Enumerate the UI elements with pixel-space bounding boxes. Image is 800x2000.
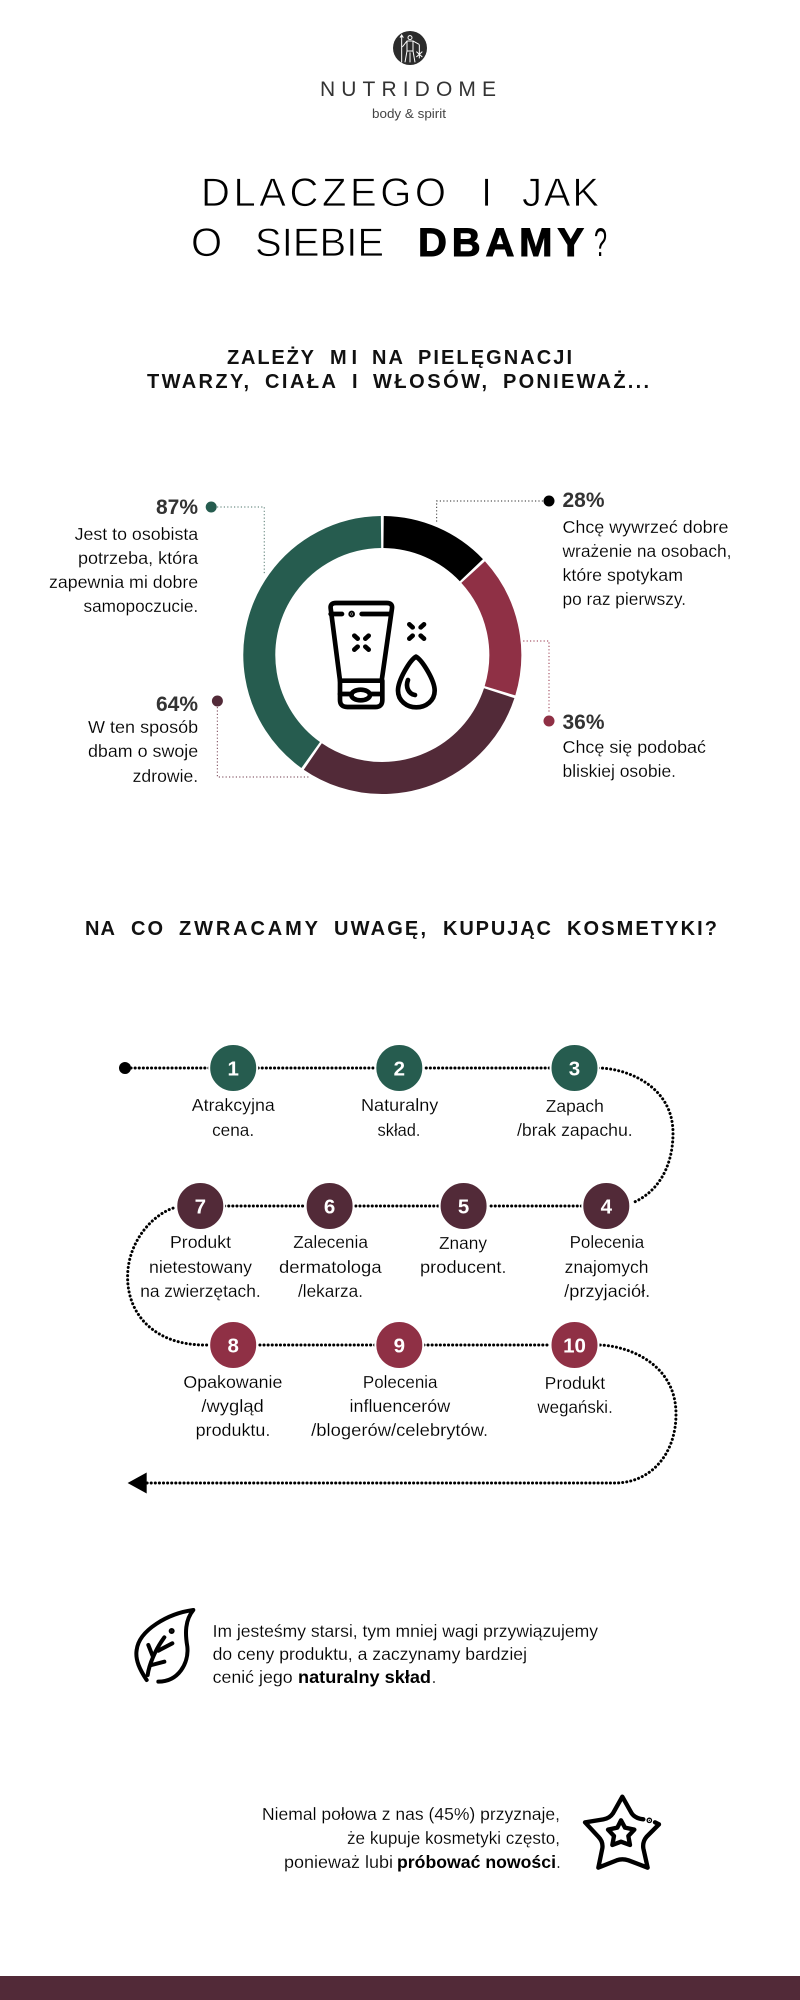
title: DBAMY [418,221,584,265]
callout: 87% [49,496,264,616]
step 7: na zwierzętach. [140,1281,261,1301]
icon: leaf [136,1610,193,1682]
step 7: 7 [195,1196,206,1218]
icon: logo emblem [393,31,427,65]
heading: section one [147,346,649,393]
callout: 28% [437,489,732,609]
donut chart [209,481,556,829]
insight text: Niemal połowa z nas (45%) przyznaje, [262,1804,560,1824]
heading: section one: I [352,371,358,393]
callout: 36%: 36% [562,711,605,734]
insight text: . [556,1852,561,1872]
step 10: Produkt [545,1373,605,1393]
step 1: 1 [227,1058,239,1080]
step 9: Polecenia [363,1372,438,1392]
step 7 [140,1182,261,1301]
callout: 36% [523,641,706,781]
icon: cosmetic tube and drop [331,603,435,707]
step 5: producent. [420,1257,506,1277]
step 8 [183,1321,282,1440]
insight text: do ceny produktu, a zaczynamy bardziej [213,1644,527,1664]
callout: 36%: bliskiej osobie. [562,761,676,781]
panel: natural ingredients insight [136,1610,598,1687]
step 3 [517,1044,633,1140]
step 7: Produkt [170,1232,231,1252]
step 4: znajomych [565,1257,649,1277]
brand tagline: body & spirit [372,106,446,121]
step 9 [311,1321,488,1440]
step 6: 6 [324,1196,335,1218]
heading: section two: KOSMETYKI? [567,918,717,940]
title [191,171,607,265]
callout: 28%: wrażenie na osobach, [562,541,732,561]
callout: 36%: Chcę się podobać [562,737,706,757]
step 7: nietestowany [149,1257,252,1277]
step 4: /przyjaciół. [564,1281,650,1301]
heading: section one: WŁOSÓW, [373,369,487,393]
heading: section one: NA [372,347,403,369]
step 5 [420,1182,506,1277]
step 6: /lekarza. [298,1281,363,1301]
header: brand logo [320,31,496,121]
title: I [481,171,492,215]
heading: section one: PIELĘGNACJI [418,347,572,369]
panel: ranked path of purchase factors [119,1044,676,1494]
brand name: NUTRIDOME [320,78,496,101]
insight text [262,1804,561,1872]
heading: section one: TWARZY, [147,371,249,393]
callout: 28%: po raz pierwszy. [562,589,686,609]
callout: 87%: potrzeba, która [78,548,198,568]
callout: 87%: zapewnia mi dobre [49,572,198,592]
icon: star [585,1797,659,1868]
step 6 [279,1182,382,1301]
heading: section one: CIAŁA [265,371,336,393]
step 9: 9 [394,1334,405,1358]
title: DLACZEGO [201,171,446,215]
step 5: Znany [439,1233,487,1253]
insight text: ponieważ lubi [284,1852,393,1872]
step 2: skład. [378,1120,420,1140]
step 6: Zalecenia [293,1232,368,1252]
step 3: Zapach [546,1096,604,1116]
heading: section one: ZALEŻY [227,346,315,369]
insight text [213,1621,598,1687]
callout: 64% [88,693,309,786]
step 9: influencerów [350,1396,451,1416]
panel: donut chart with callouts [49,481,732,829]
heading: section one: MI [330,347,357,369]
callout: 64%: 64% [156,693,198,716]
step 10: wegański. [536,1397,613,1417]
arrow: dotted winding path [119,1062,676,1494]
step 8: Opakowanie [183,1372,282,1392]
step 1: cena. [212,1120,254,1140]
step 3: /brak zapachu. [517,1120,633,1140]
step 8: 8 [227,1334,239,1358]
heading: section two: KUPUJĄC [443,918,551,940]
step 8: /wygląd [201,1396,264,1416]
heading: section two: NA [85,918,115,940]
step 10: 10 [563,1334,586,1358]
step 1: Atrakcyjna [192,1095,275,1115]
callout: 64%: W ten sposób [88,717,198,737]
step 1 [192,1044,275,1140]
insight text: naturalny skład [298,1667,431,1687]
insight text: . [432,1667,436,1687]
callout: 28%: Chcę wywrzeć dobre [562,517,728,537]
insight text: cenić jego [213,1667,293,1687]
heading: section two: UWAGĘ, [334,918,426,940]
step 2: Naturalny [361,1095,439,1115]
callout: 28%: 28% [562,489,605,512]
callout: 87%: samopoczucie. [84,596,198,616]
callout: 64%: zdrowie. [133,766,198,786]
title: JAK [522,171,599,215]
title: ? [594,221,607,265]
step 6: dermatologa [279,1257,382,1277]
step 9: /blogerów/celebrytów. [311,1420,488,1440]
step 2: 2 [394,1058,405,1080]
callout: 64%: dbam o swoje [88,741,198,761]
step 4 [564,1182,650,1301]
panel: trying new products insight [262,1797,659,1872]
step 4: 4 [601,1196,613,1218]
insight text: Im jesteśmy starsi, tym mniej wagi przywiązujemy [213,1621,598,1641]
callout: 87%: Jest to osobista [75,524,198,544]
heading: section two: CO [131,918,163,940]
title: SIEBIE [255,221,384,265]
heading: section two: ZWRACAMY [179,918,319,940]
step 3: 3 [569,1058,580,1080]
step 2 [361,1044,439,1140]
callout: 28%: które spotykam [562,565,683,585]
insight text: próbować nowości [397,1852,556,1872]
callout: 87%: 87% [156,496,198,519]
step 10 [536,1321,613,1417]
heading: section two [85,918,717,940]
step 4: Polecenia [570,1232,644,1252]
insight text: że kupuje kosmetyki często, [347,1828,560,1848]
heading: section one: PONIEWAŻ... [503,370,649,393]
footer band [0,1976,800,2000]
title: O [191,221,222,265]
step 8: produktu. [196,1420,270,1440]
step 5: 5 [458,1196,469,1218]
